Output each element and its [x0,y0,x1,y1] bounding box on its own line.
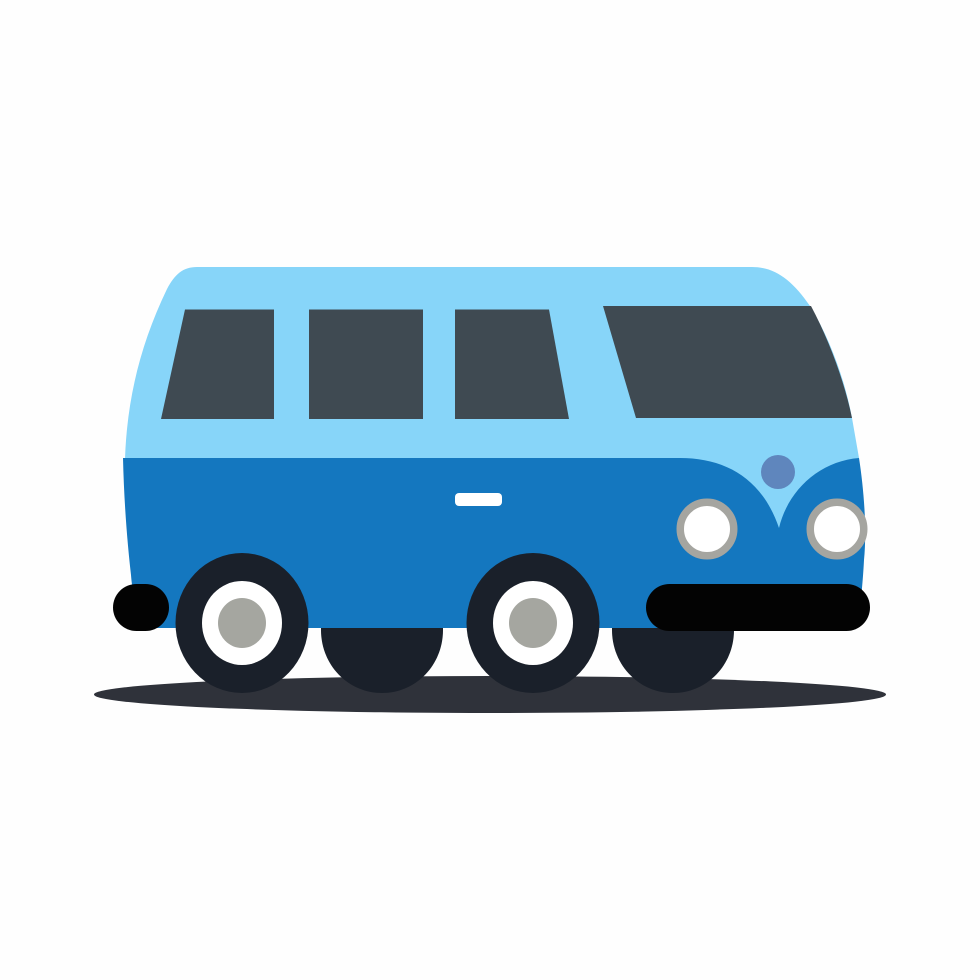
front wheel [466,553,600,693]
door handle [455,493,502,506]
middle side window [309,310,423,419]
ground shadow [94,676,886,713]
front side window [455,310,569,419]
van lower body [123,458,865,628]
rear side window [161,310,274,419]
left headlight [680,502,734,556]
right headlight [810,502,864,556]
windshield [603,306,852,418]
front emblem [761,455,795,489]
front bumper [646,584,870,631]
rear wheel [176,553,308,693]
far-side wheel front [612,626,734,693]
far-side wheel rear [321,626,443,693]
rear bumper [113,584,169,631]
van upper body [125,267,859,540]
